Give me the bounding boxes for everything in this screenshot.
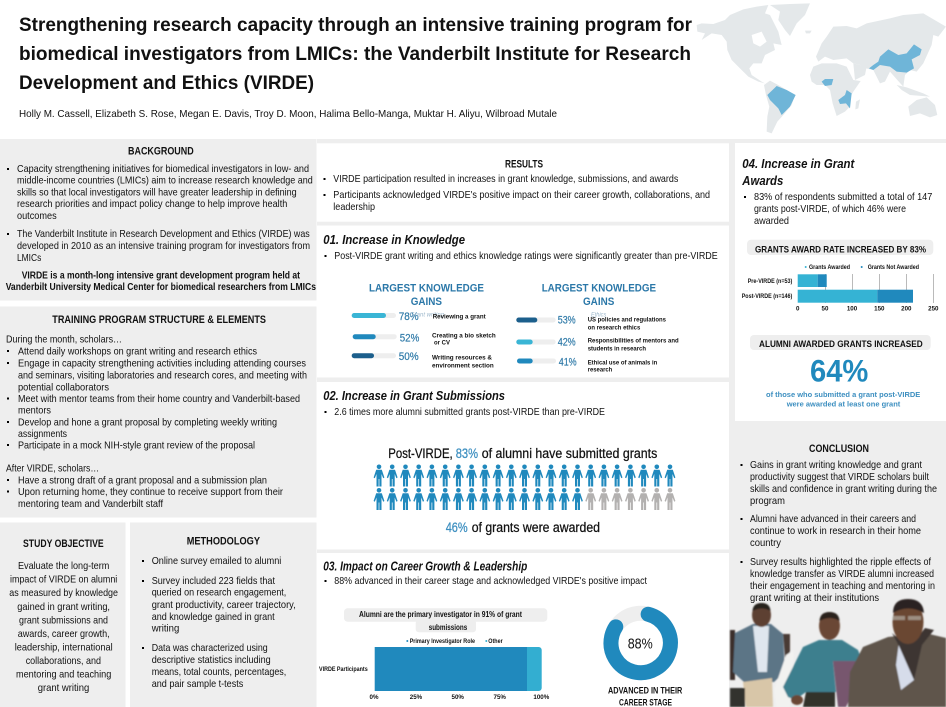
text block: methodology bullets: grant productivity, career trajectory, <box>152 600 296 611</box>
text block: conclusion bullets: grant writing at their institutions <box>750 593 879 604</box>
chart: grants awarded stacked bars <box>742 264 939 312</box>
text block: study objective: Evaluate the long-term <box>18 561 109 572</box>
text block: background bullets: outcomes <box>17 211 57 222</box>
text block: 46 percent awarded: of grants were awarded <box>472 520 600 535</box>
text block: 01 bullet: Post-VIRDE grant writing and ethics knowledge ratings were significantly greater than pre-VIRDE <box>334 251 718 262</box>
panel: conclusion <box>730 443 946 707</box>
chart: grant writing knowledge gains: or CV <box>434 340 451 346</box>
statistic: 64 percent: 64% <box>810 353 868 389</box>
heading: 04: 04. Increase in Grant <box>742 156 855 171</box>
panel: results <box>317 143 729 222</box>
text block: after VIRDE <box>6 464 283 510</box>
chart: primary investigator bar <box>319 608 550 701</box>
text block: background bullets: LMICs <box>17 253 41 264</box>
text block: after VIRDE: mentoring team and Vanderbilt staff <box>18 499 163 510</box>
heading: study objective: STUDY OBJECTIVE <box>23 538 104 550</box>
text block: after VIRDE: After VIRDE, scholars… <box>6 464 99 474</box>
text block: methodology bullets: Online survey emailed to alumni <box>152 556 281 567</box>
text block: conclusion bullets: Alumni have advanced in their careers and <box>750 514 916 525</box>
heading: alumni awarded: ALUMNI AWARDED GRANTS INCREASED <box>759 338 923 349</box>
text block: during the month: assignments <box>18 429 67 440</box>
text block: background bullets: middle-income countries (LMICs) aim to increase research knowledge and <box>17 176 313 187</box>
chart: grants awarded stacked bars: Pre-VIRDE (n=53) <box>748 278 792 285</box>
text block: study objective: impact of VIRDE on alumni <box>10 575 117 586</box>
text block: methodology bullets: queried on research engagement, <box>152 588 286 599</box>
heading: 83 percent of alumni <box>388 446 658 461</box>
photo: three alumni <box>730 599 946 707</box>
panel: training program <box>0 306 316 518</box>
heading: alumni awarded <box>750 335 931 350</box>
text block: conclusion bullets <box>740 460 937 604</box>
chart: grant writing knowledge gains: environment section <box>432 362 494 369</box>
heading: award rate <box>747 240 933 255</box>
text block: results bullets <box>324 174 710 213</box>
chart: primary investigator bar: 100% <box>533 694 550 701</box>
text block: 64 percent caption: were awarded at least one grant <box>786 400 901 408</box>
text block: during the month: Attend daily workshops on grant writing and research ethics <box>18 346 257 358</box>
text block: 46 percent awarded: 46% <box>446 520 468 535</box>
text block: study objective: awards, career growth, <box>18 629 110 640</box>
text block: study objective: leadership, international <box>15 643 113 654</box>
text block: conclusion bullets: program <box>750 496 785 507</box>
text block: methodology bullets: descriptive statistics including <box>152 655 271 666</box>
text block: conclusion bullets: continue to work in research in their home <box>750 526 921 537</box>
text block: results bullets: leadership <box>333 202 375 213</box>
text block: methodology bullets: and knowledge gained in grant <box>152 612 275 623</box>
chart: primary investigator bar: VIRDE Participants <box>319 666 368 673</box>
text block: during the month: and seminars, visiting laboratories and research cores, and meeting with <box>18 370 307 382</box>
heading: 83 percent of alumni: 83% <box>456 446 478 461</box>
text block: study objective: as measured by knowledge <box>9 588 118 599</box>
text block: after VIRDE: Upon returning home, they continue to receive support from their <box>18 487 283 498</box>
callout: VIRDE definition <box>6 270 316 293</box>
authors: Holly M. Cassell, Elizabeth S. Rose, Megan E. Davis, Troy D. Moon, Halima Bello-Manga, Muktar H. Aliyu, Wilbroad Mutale <box>19 109 557 120</box>
world map <box>697 3 946 133</box>
panel: 02 increase in grant submissions <box>317 382 729 550</box>
heading: conclusion: CONCLUSION <box>809 443 869 455</box>
text block: 04 bullet: grants post-VIRDE, of which 46% were <box>754 204 906 215</box>
text block: background bullets: skills so that local investigators will have greater leadership in defining <box>17 187 297 198</box>
chart: ethics knowledge gains: on research ethics <box>588 324 641 331</box>
text block: study objective <box>9 561 118 694</box>
chart: grant writing knowledge gains: 78% <box>399 311 419 323</box>
chart: ethics knowledge gains: US policies and regulations <box>588 317 666 324</box>
panel: 04 increase in grant awards <box>735 143 946 421</box>
heading: 83 percent of alumni: of alumni have submitted grants <box>482 446 658 461</box>
chart: grants awarded stacked bars: 150 <box>874 306 885 312</box>
panel: background <box>0 139 316 300</box>
text block: after VIRDE: Have a strong draft of a grant proposal and a submission plan <box>18 476 267 486</box>
chart: ethics knowledge gains: Ethics <box>591 312 607 318</box>
chart: ethics knowledge gains: GAINS <box>583 296 614 308</box>
text block: 64 percent caption: of those who submitted a grant post-VIRDE <box>766 390 920 399</box>
text block: methodology bullets: and pair sample t-tests <box>152 679 243 690</box>
heading: methodology: METHODOLOGY <box>187 536 260 548</box>
text block: results bullets: Participants acknowledged VIRDE's positive impact on their career growth, collaborations, and <box>333 190 710 201</box>
chart: primary investigator bar: submissions <box>429 622 468 632</box>
chart: grant writing knowledge gains <box>352 282 496 369</box>
chart: primary investigator bar: Alumni are the primary investigator in 91% of grant <box>359 609 522 619</box>
text block: 02 bullet: 2.6 times more alumni submitted grants post-VIRDE than pre-VIRDE <box>334 407 605 418</box>
text block: methodology bullets: Survey included 223 fields that <box>152 576 275 587</box>
chart: primary investigator bar: 50% <box>452 694 464 701</box>
chart: 88 percent donut: ADVANCED IN THEIR <box>608 686 683 696</box>
chart: primary investigator bar: 0% <box>370 694 379 701</box>
text block: during the month: mentors <box>18 406 51 416</box>
chart: grants awarded stacked bars: Grants Awarded <box>809 264 850 271</box>
chart: ethics knowledge gains: Ethical use of animals in <box>588 360 657 367</box>
title: Strengthening research capacity through an intensive training program for <box>19 14 692 36</box>
text block: background bullets: Capacity strengthening initiatives for biomedical investigators in low- and <box>17 164 309 175</box>
text block: methodology bullets: writing <box>151 623 179 634</box>
text block: study objective: grant writing <box>38 683 89 694</box>
text block: methodology bullets: Data was characterized using <box>152 643 268 654</box>
text block: methodology bullets <box>142 556 296 690</box>
text block: during the month: Develop and hone a grant proposal by completing weekly writing <box>18 418 277 428</box>
text block: during the month: During the month, scholars… <box>6 334 122 346</box>
chart: grants awarded stacked bars: 200 <box>901 306 912 312</box>
text block: study objective: grant submissions and <box>19 616 108 627</box>
chart: grants awarded stacked bars: 250 <box>928 306 939 312</box>
text block: 03 bullet: 88% advanced in their career stage and acknowledged VIRDE's positive impact <box>334 576 647 587</box>
chart: ethics knowledge gains: Responsibilities of mentors and <box>588 337 679 344</box>
heading: 04: Awards <box>741 173 783 188</box>
chart: ethics knowledge gains: 42% <box>558 337 576 349</box>
text block: conclusion bullets: Gains in grant writing knowledge and grant <box>750 460 922 471</box>
text block: conclusion bullets: country <box>750 538 782 549</box>
chart: grant writing knowledge gains: GAINS <box>411 296 442 308</box>
title: biomedical investigators from LMICs: the Vanderbilt Institute for Research <box>19 43 691 65</box>
chart: primary investigator bar: 75% <box>494 694 506 701</box>
text block: background bullets: research priorities and impact policy change to help improve health <box>17 199 287 210</box>
text block: background bullets: The Vanderbilt Institute in Research Development and Ethics (VIRDE) was <box>17 229 310 240</box>
chart: ethics knowledge gains <box>516 282 679 374</box>
chart: grant writing knowledge gains: Writing resources & <box>432 354 492 361</box>
chart: grant writing knowledge gains: Reviewing a grant <box>433 314 486 320</box>
chart: grants awarded stacked bars: 100 <box>847 306 858 312</box>
text block: 64 percent caption <box>766 390 920 408</box>
heading: 02: 02. Increase in Grant Submissions <box>323 388 505 403</box>
title <box>19 14 692 94</box>
chart: ethics knowledge gains: 41% <box>559 357 577 369</box>
text block: during the month: potential collaborators <box>18 382 109 394</box>
chart: ethics knowledge gains: LARGEST KNOWLEDGE <box>542 282 656 294</box>
chart: ethics knowledge gains: research <box>588 367 612 374</box>
heading: results: RESULTS <box>505 158 543 170</box>
title: Development and Ethics (VIRDE) <box>19 72 314 94</box>
panel: 03 impact on career growth <box>317 553 729 707</box>
chart: grant writing knowledge gains: 50% <box>399 351 419 363</box>
heading: training program: TRAINING PROGRAM STRUCTURE & ELEMENTS <box>52 314 266 326</box>
heading: 04 <box>741 156 855 188</box>
chart: primary investigator bar: 25% <box>410 694 423 701</box>
callout: VIRDE definition: Vanderbilt University Medical Center for biomedical researchers from LMICs <box>6 282 316 293</box>
text block: during the month: Participate in a mock NIH-style grant review of the proposal <box>18 440 255 452</box>
text block: results bullets: VIRDE participation resulted in increases in grant knowledge, submissions, and awards <box>333 174 678 185</box>
text block: methodology bullets: means, total counts, percentages, <box>152 667 286 678</box>
heading: 01: 01. Increase in Knowledge <box>323 232 465 247</box>
chart: grant writing knowledge gains: Grant writing <box>410 312 444 318</box>
chart: ethics knowledge gains: students in research <box>588 345 646 352</box>
text block: study objective: collaborations, and <box>26 656 101 667</box>
chart: primary investigator bar: Primary Investigator Role <box>410 638 475 645</box>
chart: primary investigator bar: Other <box>488 638 503 645</box>
text block: during the month: Meet with mentor teams from their home country and Vanderbilt-based <box>18 394 300 405</box>
chart: grants awarded stacked bars: Post-VIRDE (n=146) <box>742 293 792 300</box>
chart: grants awarded stacked bars: Grants Not Awarded <box>868 264 919 271</box>
icon array: people <box>374 464 675 510</box>
text block: study objective: gained in grant writing, <box>17 602 110 613</box>
heading: background: BACKGROUND <box>128 146 194 158</box>
text block: study objective: mentoring and teaching <box>16 670 111 681</box>
heading: 03: 03. Impact on Career Growth & Leadership <box>323 558 527 574</box>
chart: grant writing knowledge gains: 52% <box>400 332 419 344</box>
panel: study objective <box>0 522 126 707</box>
callout: VIRDE definition: VIRDE is a month-long intensive grant development program held at <box>22 270 300 282</box>
chart: ethics knowledge gains: 53% <box>558 315 576 327</box>
text block: during the month <box>6 334 307 452</box>
chart: grants awarded stacked bars: 0 <box>796 306 800 312</box>
panel: methodology <box>130 522 316 707</box>
chart: grant writing knowledge gains: LARGEST KNOWLEDGE <box>369 282 484 294</box>
text block: background bullets: developed in 2010 as an intensive training program for investigators from <box>17 241 310 252</box>
chart: grant writing knowledge gains: Creating a bio sketch <box>432 332 496 339</box>
text block: during the month: Engage in capacity strengthening activities including attending courses <box>18 358 306 370</box>
heading: 83 percent of alumni: Post-VIRDE, <box>388 446 453 461</box>
panel: 01 increase in knowledge <box>317 226 729 378</box>
text block: 04 bullet: awarded <box>754 216 789 227</box>
chart: grants awarded stacked bars: 50 <box>822 306 829 312</box>
chart: 88 percent donut: 88% <box>628 636 653 652</box>
text block: 04 bullet <box>744 192 932 227</box>
chart: 88 percent donut <box>605 607 683 707</box>
text block: background bullets <box>7 164 313 264</box>
